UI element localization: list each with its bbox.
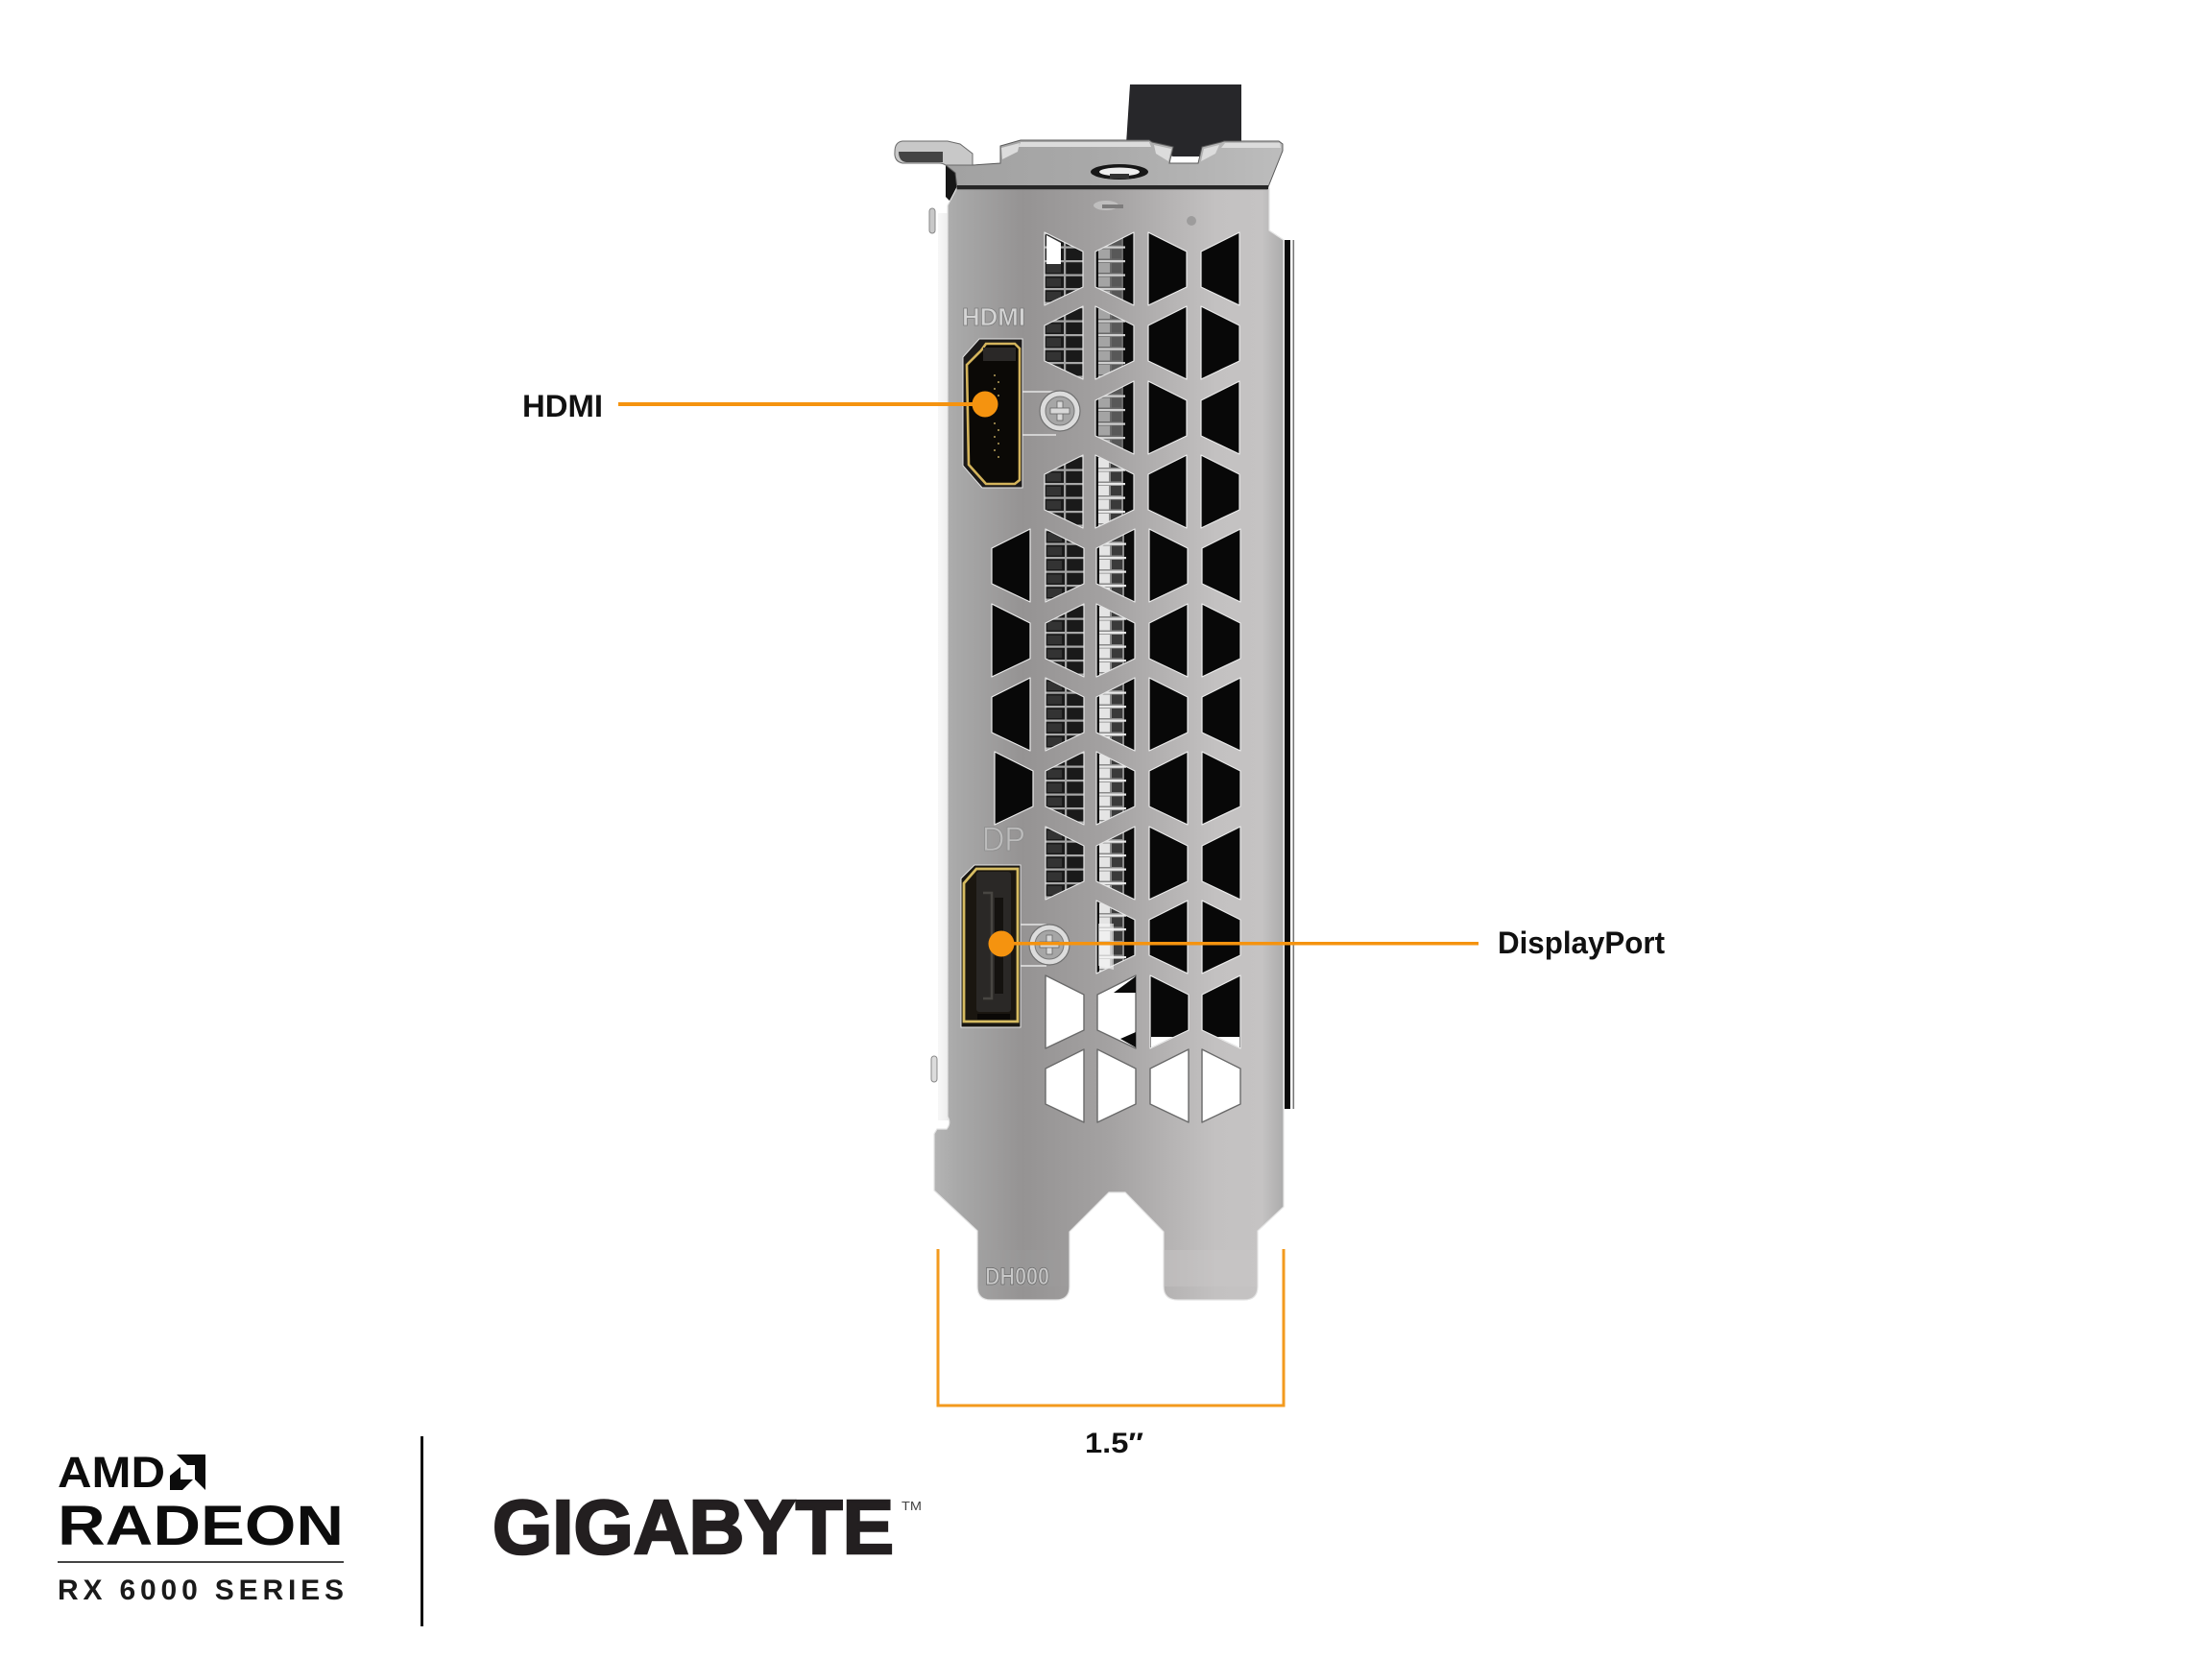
top shelf of bracket [946, 140, 1283, 189]
right side dark edge of the card [1285, 240, 1294, 1109]
HDMI callout [522, 389, 998, 423]
DisplayPort callout label: DisplayPort [1498, 926, 1665, 960]
DisplayPort port [961, 865, 1021, 1027]
left tab shadow [899, 152, 943, 162]
ventilation holes: far-left column [992, 529, 1033, 825]
RX 6000 SERIES text: RX 6000 SERIES [58, 1575, 344, 1606]
GIGABYTE logo [493, 1484, 922, 1570]
RADEON wordmark: RADEON [58, 1495, 344, 1557]
width dimension label: 1.5″ [1085, 1428, 1143, 1459]
HDMI leader line [618, 402, 985, 406]
DisplayPort callout [989, 926, 1665, 960]
shelf top highlight [1001, 142, 1281, 161]
ventilation holes: open white holes [1046, 975, 1240, 1122]
HDMI port [963, 339, 1022, 488]
left white side strip [929, 208, 951, 1120]
shelf fold line [957, 185, 1268, 189]
white and black details inside holes [1046, 235, 1239, 1047]
ventilation holes: fins column two upper [1095, 232, 1134, 454]
HDMI screw [1022, 391, 1080, 435]
DisplayPort leader dot [989, 931, 1014, 956]
ventilation holes: fins column two lower [1095, 455, 1135, 974]
logo divider [421, 1436, 423, 1626]
blurred mark under fold [1094, 201, 1196, 226]
HDMI callout label: HDMI [522, 389, 603, 423]
lighter lower tab bands [978, 1250, 1257, 1286]
bracket plate [934, 187, 1284, 1300]
DisplayPort leader line [1001, 942, 1479, 945]
DH000 embossed label: DH000 [985, 1263, 1049, 1290]
trademark: TM [902, 1499, 922, 1513]
black card block behind the bracket [1126, 84, 1241, 156]
left tab of bracket [895, 141, 973, 165]
GIGABYTE wordmark: GIGABYTE [493, 1484, 894, 1570]
dark fold behind upper left of bracket [946, 165, 960, 204]
graphics card bracket photo [895, 84, 1294, 1300]
HDMI embossed label: HDMI [962, 302, 1025, 331]
DP embossed label: DP [982, 821, 1025, 858]
DisplayPort screw [1021, 925, 1070, 966]
width dimension bracket [938, 1249, 1284, 1406]
HDMI leader dot [972, 392, 998, 417]
logo rule [58, 1561, 344, 1563]
shelf slot [1091, 164, 1148, 180]
AMD wordmark: AMD [58, 1448, 165, 1497]
AMD arrow icon [170, 1455, 205, 1490]
ventilation holes: fins column one [1045, 232, 1084, 900]
ventilation holes: black columns [1148, 232, 1240, 1048]
AMD Radeon logo [58, 1448, 344, 1606]
